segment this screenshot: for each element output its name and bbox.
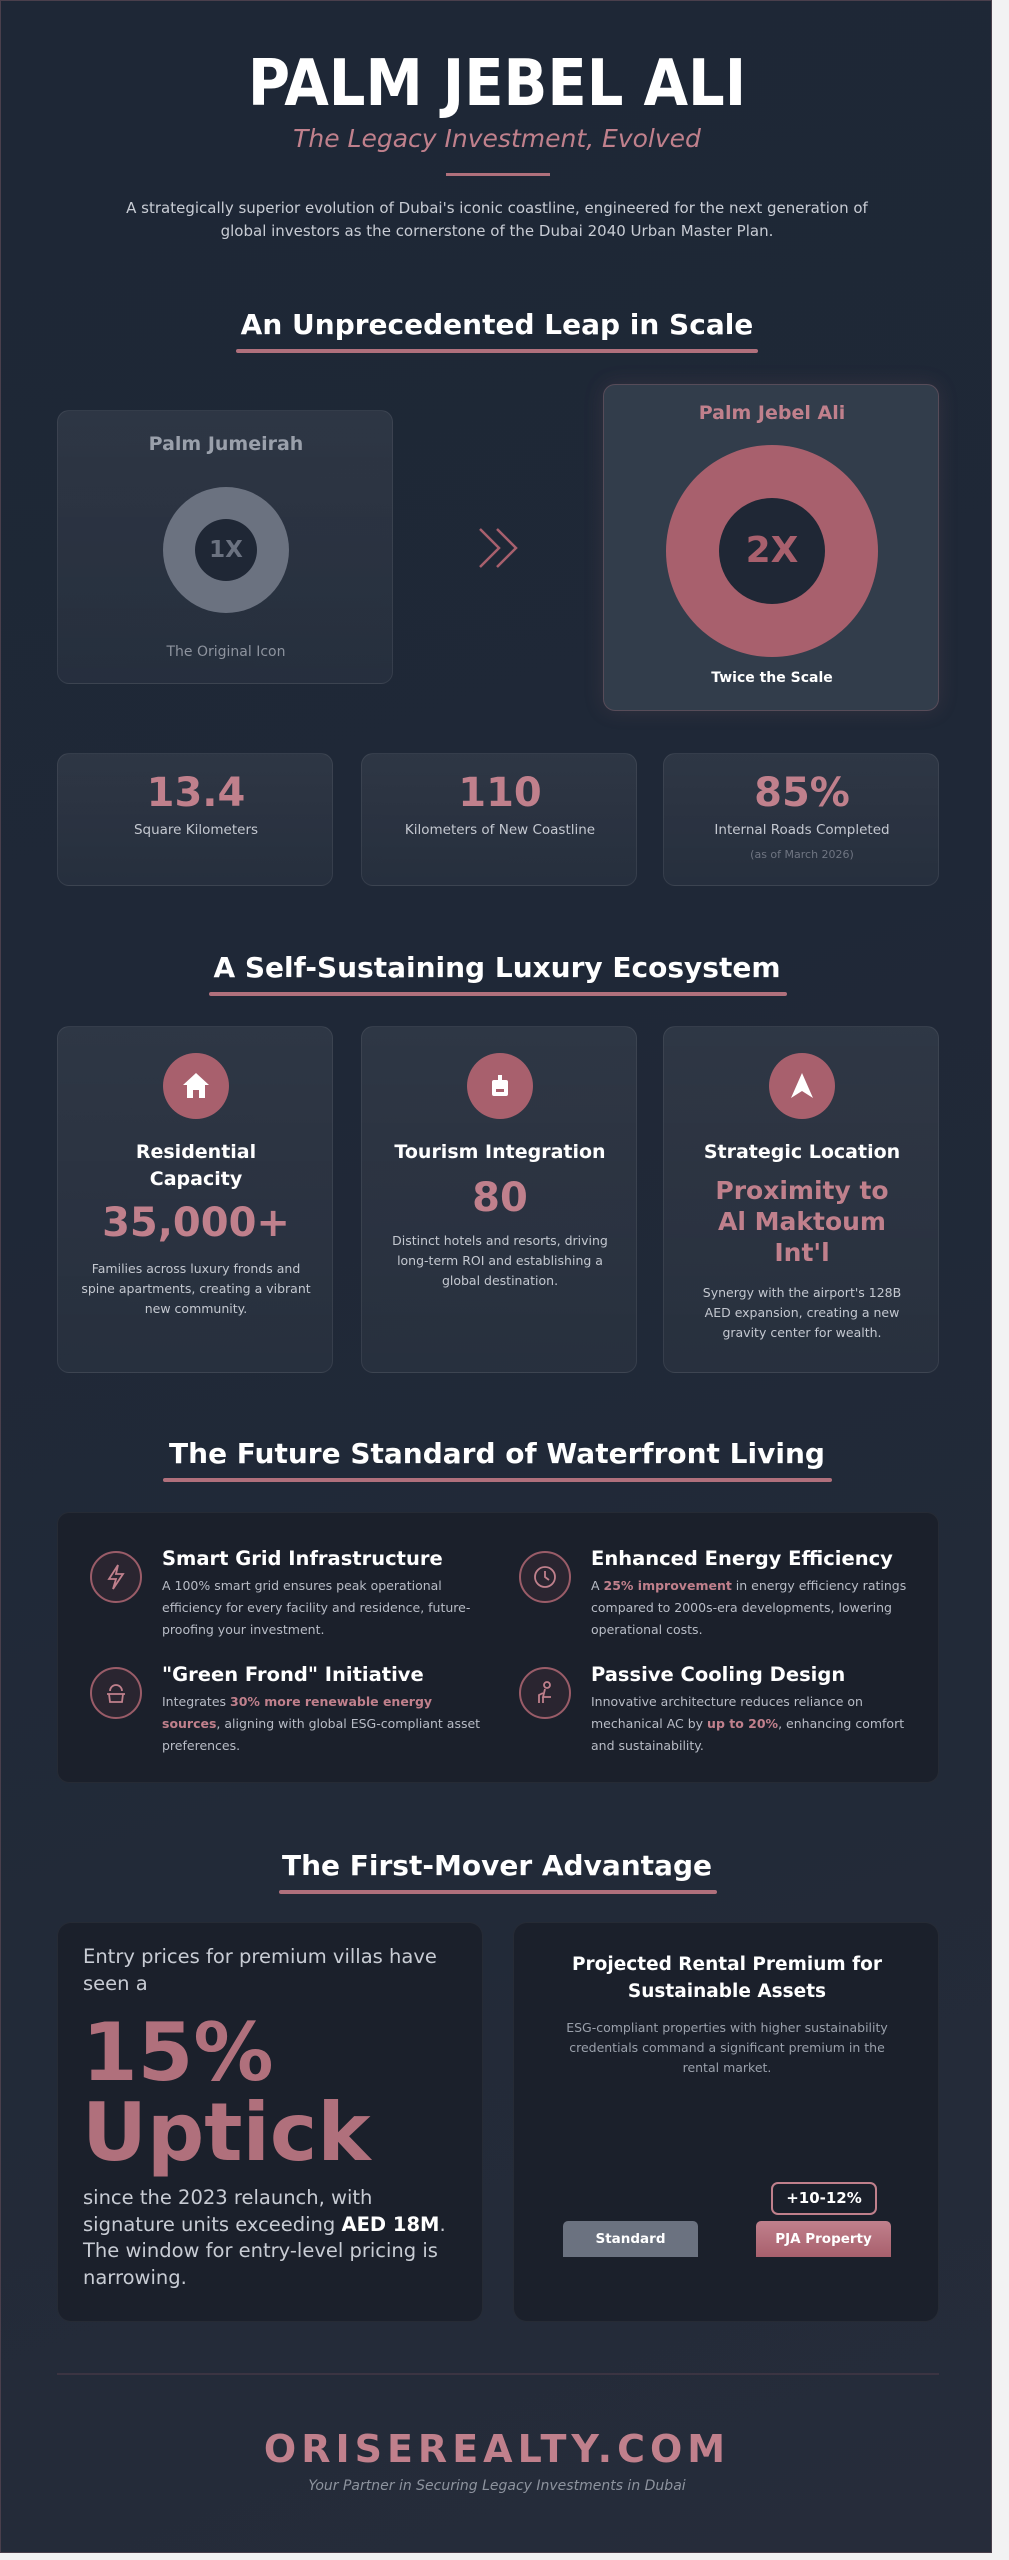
- panel: location: [663, 1026, 939, 1373]
- panel: tourism: Tourism Integration: [394, 1141, 606, 1163]
- panel: sustainability features: Integrates 30% more renewable energy sources, aligning with global ESG-compliant asset preferences.: [162, 1694, 480, 1753]
- heading: scale: An Unprecedented Leap in Scale: [241, 308, 753, 341]
- panel: location: Synergy with the airport's 128B AED expansion, creating a new gravity center for wealth.: [703, 1285, 901, 1340]
- big stat: 15% uptick: Uptick: [82, 2086, 371, 2179]
- panel: sustainability features: Innovative architecture reduces reliance on mechanical AC by up to 20%, enhancing comfort and sustainability.: [591, 1694, 904, 1753]
- panel: location: Strategic Location: [704, 1141, 900, 1163]
- donut 2x: [666, 445, 878, 657]
- heading: first mover: The First-Mover Advantage: [282, 1849, 712, 1882]
- badge: +10-12%: [786, 2189, 862, 2207]
- icon: bolt: [90, 1551, 142, 1603]
- panel: uptick: [57, 1922, 483, 2322]
- panel: tourism: 80: [472, 1175, 528, 1221]
- feature: passive cooling: Passive Cooling Design: [591, 1663, 845, 1686]
- title: PALM JEBEL ALI: [248, 47, 746, 121]
- subtitle: The Legacy Investment, Evolved: [293, 124, 701, 153]
- big stat: 15% uptick: 15%: [82, 2006, 273, 2099]
- panel: uptick: since the 2023 relaunch, with signature units exceeding AED 18M. The window for entry-level pricing is narrowing.: [83, 2186, 446, 2288]
- stat: 110: Kilometers of New Coastline: [405, 822, 595, 838]
- panel: residential: 35,000+: [102, 1200, 290, 1246]
- feature: green frond: "Green Frond" Initiative: [162, 1663, 424, 1686]
- panel: rental premium chart: [513, 1922, 939, 2322]
- stat: 85%: Internal Roads Completed: [714, 822, 890, 838]
- panel: Palm Jumeirah: The Original Icon: [166, 644, 286, 660]
- feature: smart grid: Smart Grid Infrastructure: [162, 1547, 443, 1570]
- panel: rental premium chart: ESG-compliant properties with higher sustainability credentials command a significant premium in the rental market.: [566, 2020, 888, 2075]
- icon: plane: [769, 1053, 835, 1119]
- icon: pot: [90, 1667, 142, 1719]
- stat: 85%: [663, 753, 939, 886]
- panel: sustainability features: A 25% improvement in energy efficiency ratings compared to 2000s-era developments, lowering operational costs.: [591, 1578, 906, 1637]
- panel: location: Al Maktoum: [718, 1207, 886, 1236]
- donut 1x: 1X: [209, 537, 243, 563]
- panel: Palm Jebel Ali: Twice the Scale: [711, 670, 833, 686]
- footer brand: ORISEREALTY.COM: [264, 2427, 730, 2471]
- heading: ecosystem: A Self-Sustaining Luxury Ecosystem: [213, 951, 781, 984]
- donut 1x: [163, 487, 289, 613]
- icon: person: [519, 1667, 571, 1719]
- stat: 13.4: Square Kilometers: [134, 822, 258, 838]
- panel: Palm Jebel Ali: [603, 384, 939, 711]
- icon: hotel: [467, 1053, 533, 1119]
- bar: standard: [563, 2221, 698, 2257]
- stat: 110: [361, 753, 637, 886]
- panel: tourism: [361, 1026, 637, 1373]
- stat: 85%: 85%: [754, 770, 850, 816]
- donut 2x: 2X: [746, 530, 798, 571]
- panel: rental premium chart: Projected Rental Premium for: [572, 1954, 882, 1975]
- heading: waterfront: The Future Standard of Waterfront Living: [169, 1437, 825, 1470]
- feature: energy efficiency: Enhanced Energy Efficiency: [591, 1547, 893, 1570]
- panel: Palm Jebel Ali: Palm Jebel Ali: [699, 402, 845, 424]
- arrow: chevrons: [479, 528, 518, 568]
- big stat: 15% uptick: [82, 2006, 372, 2179]
- bar: PJA: PJA Property: [775, 2231, 872, 2247]
- footer tagline: Your Partner in Securing Legacy Investments in Dubai: [308, 2478, 686, 2494]
- stat: 110: 110: [458, 770, 542, 816]
- intro text: A strategically superior evolution of Dubai's iconic coastline, engineered for the next generation of global investors as the cornerstone of the Dubai 2040 Urban Master Plan.: [126, 199, 868, 240]
- icon: clock: [519, 1551, 571, 1603]
- panel: residential: Residential: [136, 1141, 256, 1163]
- panel: residential: Capacity: [150, 1168, 242, 1190]
- panel: tourism: Distinct hotels and resorts, driving long-term ROI and establishing a global destination.: [392, 1233, 608, 1288]
- stat: 13.4: 13.4: [147, 770, 245, 816]
- panel: sustainability features: A 100% smart grid ensures peak operational efficiency for every facility and residence, future-proofing your investment.: [162, 1578, 470, 1637]
- panel: sustainability features: [57, 1512, 939, 1783]
- panel: location: Proximity to: [715, 1176, 889, 1205]
- panel: residential: [57, 1026, 333, 1373]
- bar: standard: Standard: [596, 2231, 666, 2247]
- bar: PJA: [756, 2221, 891, 2257]
- stat: 13.4: [57, 753, 333, 886]
- badge: [771, 2182, 877, 2215]
- panel: residential: Families across luxury fronds and spine apartments, creating a vibrant new community.: [81, 1261, 311, 1316]
- panel: uptick: Entry prices for premium villas have seen a: [83, 1945, 437, 1995]
- panel: Palm Jumeirah: [57, 410, 393, 684]
- panel: rental premium chart: Sustainable Assets: [628, 1981, 826, 2002]
- stat: 85%: (as of March 2026): [750, 848, 854, 861]
- panel: location: Int'l: [774, 1238, 830, 1267]
- icon: house: [163, 1053, 229, 1119]
- panel: Palm Jumeirah: Palm Jumeirah: [149, 433, 303, 455]
